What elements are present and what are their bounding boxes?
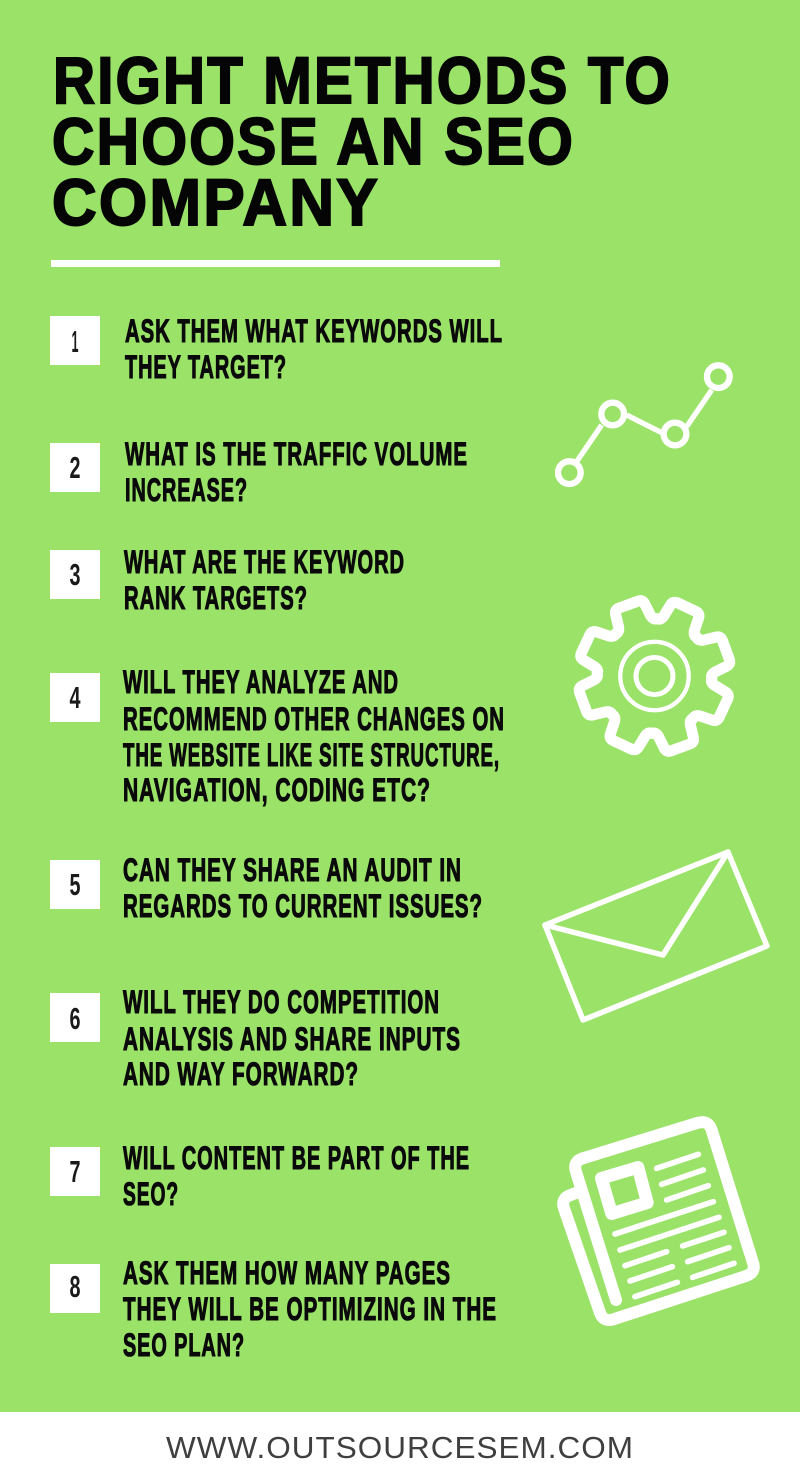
icon: envelope [545, 852, 767, 1020]
title: RIGHT METHODS TO [53, 43, 672, 117]
footer band [0, 1412, 800, 1480]
item 6 [50, 984, 461, 1092]
item 7 [50, 1140, 470, 1212]
item 8: ASK THEM HOW MANY PAGES [123, 1255, 451, 1291]
item 2: 2 [70, 450, 80, 485]
item 3: RANK TARGETS? [124, 580, 308, 616]
item 7: WILL CONTENT BE PART OF THE [123, 1140, 470, 1176]
item 1: THEY TARGET? [125, 349, 287, 385]
item 8: SEO PLAN? [123, 1327, 245, 1363]
item 7: SEO? [123, 1176, 179, 1212]
item 8: THEY WILL BE OPTIMIZING IN THE [123, 1291, 497, 1327]
item 2: INCREASE? [125, 472, 248, 508]
item 1: 1 [72, 324, 78, 359]
item 4: 4 [70, 680, 81, 715]
item 5: CAN THEY SHARE AN AUDIT IN [123, 852, 462, 888]
item 5 [50, 852, 483, 924]
item 8: 8 [70, 1269, 80, 1304]
icon: newspaper [563, 1122, 754, 1320]
footer band: WWW.OUTSOURCESEM.COM [166, 1430, 634, 1465]
item 2 [50, 436, 468, 508]
item 4: RECOMMEND OTHER CHANGES ON [123, 701, 505, 737]
item 6: AND WAY FORWARD? [123, 1056, 359, 1092]
item 4 [50, 664, 505, 808]
icon: gear [576, 597, 733, 755]
item 6: 6 [70, 1001, 80, 1036]
item 4: NAVIGATION, CODING ETC? [123, 772, 431, 808]
icon: line chart [558, 365, 730, 484]
item 2: WHAT IS THE TRAFFIC VOLUME [125, 436, 468, 472]
item 6: WILL THEY DO COMPETITION [123, 984, 440, 1020]
item 3: 3 [70, 557, 80, 592]
item 6: ANALYSIS AND SHARE INPUTS [123, 1021, 461, 1057]
item 1 [50, 313, 503, 385]
title [52, 43, 672, 239]
title: CHOOSE AN SEO [52, 104, 575, 178]
item 3: WHAT ARE THE KEYWORD [124, 544, 405, 580]
item 4: THE WEBSITE LIKE SITE STRUCTURE, [123, 737, 500, 773]
title: COMPANY [52, 165, 380, 239]
item 4: WILL THEY ANALYZE AND [123, 664, 399, 700]
item 3 [50, 544, 405, 616]
item 1: ASK THEM WHAT KEYWORDS WILL [125, 313, 503, 349]
item 7: 7 [70, 1154, 80, 1189]
item 5: 5 [70, 867, 80, 902]
title underline [51, 260, 500, 267]
item 5: REGARDS TO CURRENT ISSUES? [123, 888, 483, 924]
item 8 [50, 1255, 497, 1363]
